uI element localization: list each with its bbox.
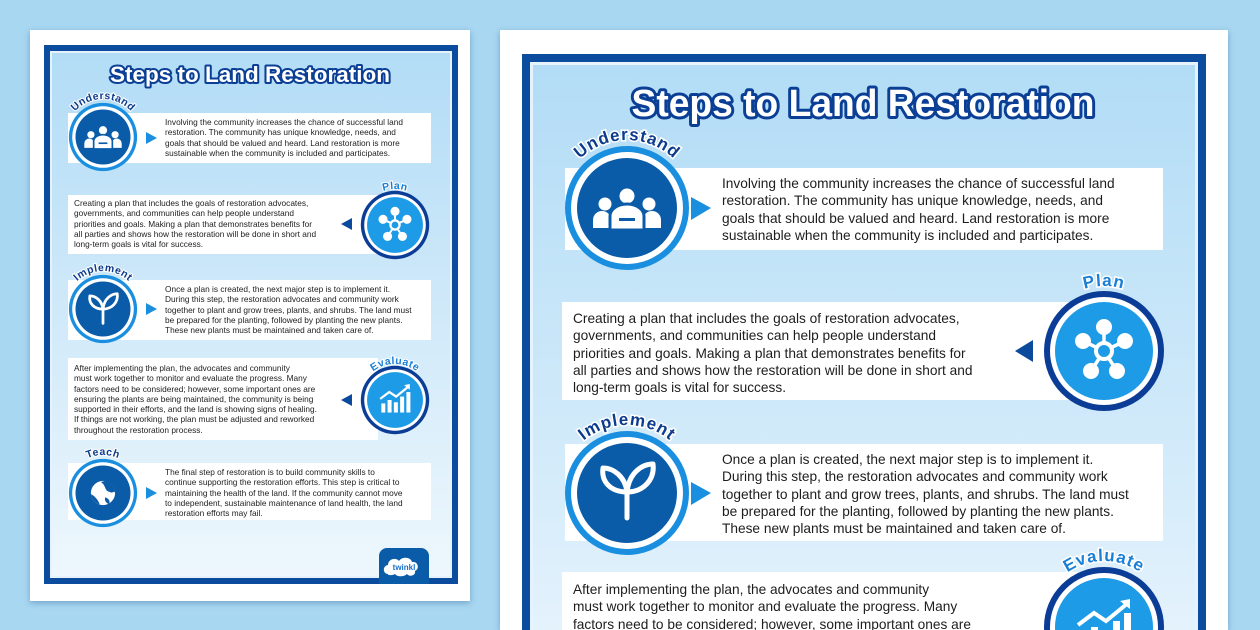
right step: evaluate xyxy=(1044,547,1164,630)
right step: plan xyxy=(1015,272,1164,411)
right text box: plan: all parties and shows how the restoration will be done in short and xyxy=(573,363,972,378)
left text box: understand: Involving the community increases the chance of successful land xyxy=(165,117,403,127)
left text box: evaluate: If things are not working, the plan must be adjusted and reworked xyxy=(74,414,314,424)
right step: understand: Understand xyxy=(571,128,682,160)
right text box: plan: governments, and communities can help people understand xyxy=(573,328,936,343)
left text box: evaluate: factors need to be considered; however, some important ones are xyxy=(74,384,315,394)
left text box: implement: These new plants must be maintained and taken care of. xyxy=(165,325,373,335)
left text box: teach: continue supporting the restoration efforts. This step is critical to xyxy=(165,477,399,487)
right text box: evaluate: must work together to monitor and evaluate the progress. Many xyxy=(573,599,957,614)
left text box: implement: be prepared for the planting, followed by planting the new plants. xyxy=(165,315,403,325)
left text box: implement: Once a plan is created, the next major step is to implement it. xyxy=(165,284,390,294)
right step: evaluate: Evaluate xyxy=(1060,547,1144,572)
right step: plan: Plan xyxy=(1081,272,1124,290)
left text box: evaluate: supported in their efforts, and the land is showing signs of healing. xyxy=(74,404,317,414)
left text box: understand: goals that should be valued and heard. Land restoration is more xyxy=(165,138,400,148)
left step: plan: Plan xyxy=(381,180,408,192)
frame: left poster border xyxy=(44,45,458,584)
left text box: teach: The final step of restoration is to build community skills to xyxy=(165,467,375,477)
left text box: understand: restoration. The community has unique knowledge, needs, and xyxy=(165,127,396,137)
right step: implement: Implement xyxy=(575,412,677,442)
left text box: understand: sustainable when the community is included and participates. xyxy=(165,148,390,158)
left text box: plan: governments, and communities can help people understand xyxy=(74,208,294,218)
right title: Steps to Land Restoration xyxy=(632,83,1094,125)
left text box: implement: During this step, the restoration advocates and community work xyxy=(165,294,399,304)
right text box: understand: goals that should be valued and heard. Land restoration is more xyxy=(722,211,1109,226)
left step: plan xyxy=(341,180,430,260)
logo: twinkl tab xyxy=(379,548,429,584)
left step: understand xyxy=(68,92,157,172)
left text box: teach: to independent, sustainable maintenance of land health, the land xyxy=(165,498,403,508)
card: left poster xyxy=(30,30,470,601)
right text box: implement: Once a plan is created, the next major step is to implement it. xyxy=(722,452,1093,467)
right text box: understand: Involving the community increases the chance of successful land xyxy=(722,176,1115,191)
right text box: evaluate xyxy=(562,572,1077,630)
left text box: understand xyxy=(68,113,431,163)
left step: understand: Understand xyxy=(69,92,137,112)
left text box: evaluate: ensuring the plants are being maintained, the community is being xyxy=(74,394,313,404)
right text box: understand xyxy=(565,168,1163,250)
left text box: implement: together to plant and grow trees, plants, and shrubs. The land must xyxy=(165,305,412,315)
right text box: plan: long-term goals is vital for success. xyxy=(573,380,786,395)
right text box: implement: These new plants must be maintained and taken care of. xyxy=(722,521,1066,536)
right step: understand xyxy=(565,128,711,270)
logo: twinkl tab: twinkl xyxy=(393,563,415,572)
frame: right poster border xyxy=(522,54,1206,630)
right step: implement xyxy=(565,412,711,555)
right text box: implement xyxy=(565,444,1163,541)
right text box: plan: Creating a plan that includes the goals of restoration advocates, xyxy=(573,311,960,326)
left step: evaluate xyxy=(341,355,430,434)
right text box: implement: During this step, the restoration advocates and community work xyxy=(722,469,1108,484)
left title: Steps to Land Restoration xyxy=(110,62,390,87)
left step: implement xyxy=(68,262,157,344)
right text box: understand: sustainable when the community is included and participates. xyxy=(722,228,1093,243)
left text box: evaluate xyxy=(68,358,378,440)
right text box: understand: restoration. The community has unique knowledge, needs, and xyxy=(722,193,1103,208)
right text box: implement: together to plant and grow trees, plants, and shrubs. The land must xyxy=(722,487,1129,502)
left step: teach xyxy=(68,448,157,528)
left text box: plan: priorities and goals. Making a plan that demonstrates benefits for xyxy=(74,219,312,229)
left text box: plan: all parties and shows how the restoration will be done in short and xyxy=(74,229,316,239)
left text box: teach: maintaining the health of the land. If the community cannot move xyxy=(165,488,403,498)
card: right poster xyxy=(500,30,1228,630)
left text box: teach xyxy=(68,463,431,520)
left text box: evaluate: throughout the restoration process. xyxy=(74,425,203,435)
left text box: plan: Creating a plan that includes the goals of restoration advocates, xyxy=(74,198,308,208)
left text box: plan: long-term goals is vital for success. xyxy=(74,239,203,249)
right text box: plan: priorities and goals. Making a plan that demonstrates benefits for xyxy=(573,346,966,361)
left text box: evaluate: After implementing the plan, the advocates and community xyxy=(74,363,290,373)
left text box: implement xyxy=(68,280,431,340)
left step: implement: Implement xyxy=(72,262,134,281)
right text box: implement: be prepared for the planting, followed by planting the new plants. xyxy=(722,504,1114,519)
left step: evaluate: Evaluate xyxy=(370,355,420,372)
left step: teach: Teach xyxy=(84,448,120,459)
left text box: plan xyxy=(68,195,378,254)
left text box: teach: restoration efforts may fail. xyxy=(165,508,263,518)
left text box: evaluate: must work together to monitor and evaluate the progress. Many xyxy=(74,373,307,383)
right text box: evaluate: After implementing the plan, the advocates and community xyxy=(573,582,929,597)
right text box: plan xyxy=(562,302,1077,400)
graphics overlay xyxy=(68,64,1164,630)
